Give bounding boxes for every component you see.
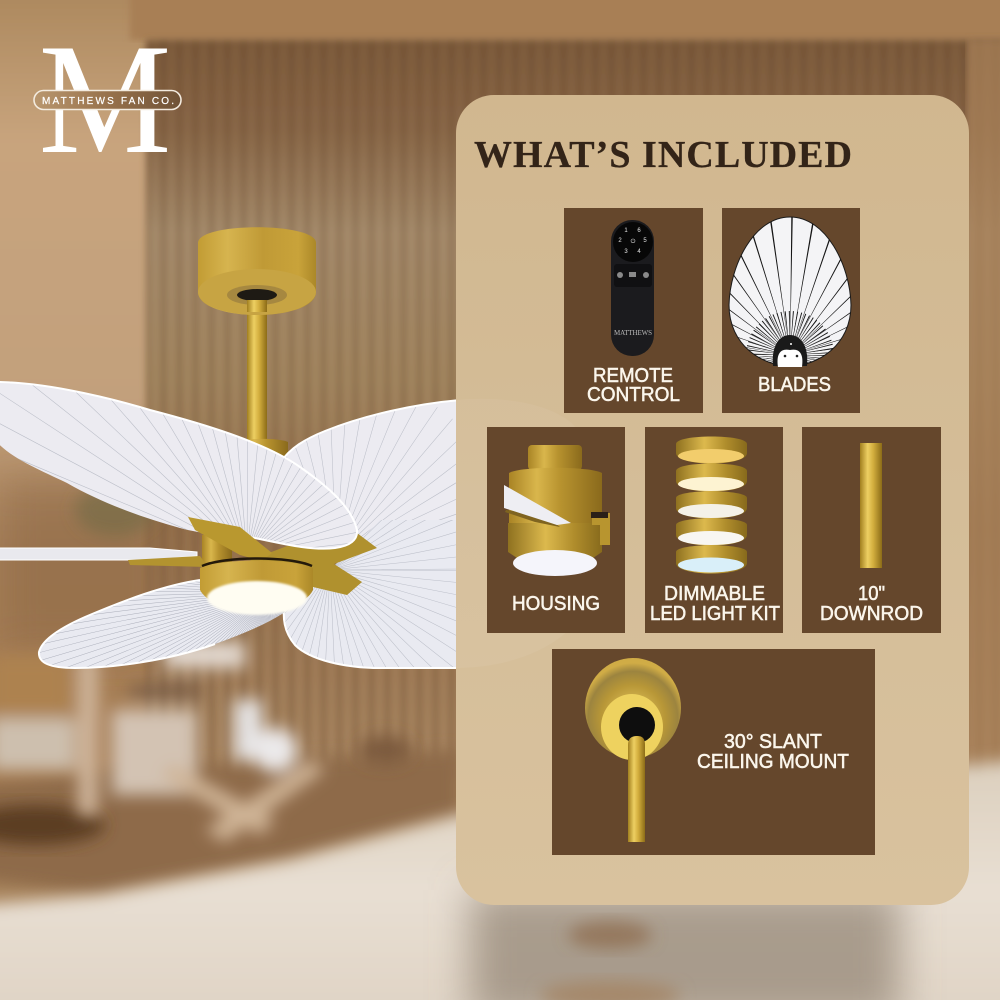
downrod [247, 295, 267, 445]
heading: WHAT’S INCLUDED [474, 134, 852, 176]
icon: downrod [860, 443, 882, 568]
icon: remote: 6 [637, 228, 641, 234]
icon: remote [611, 220, 654, 356]
ceiling fan product [0, 227, 456, 669]
fan blade: right lower [282, 520, 456, 669]
label: HOUSING [512, 593, 600, 615]
logo name pill [34, 90, 181, 110]
panel: what's included [456, 95, 969, 905]
fan arm: left [128, 556, 208, 567]
downrod collar [240, 439, 288, 470]
icon: palm blade [728, 216, 852, 367]
floor [0, 760, 1000, 1000]
ceiling band [130, 0, 1000, 40]
logo: Matthews Fan Co. [34, 12, 181, 187]
label: 30° SLANT [724, 731, 822, 753]
fan blade: lower left [38, 579, 285, 669]
label: REMOTE [593, 365, 673, 387]
motor housing band [202, 558, 312, 566]
icon: stacked LED rings [676, 436, 747, 574]
fan arm: front left [188, 517, 272, 561]
faint blade ghost behind panel [456, 399, 602, 668]
label: 10" [858, 583, 885, 605]
icon: slant mount [585, 658, 681, 842]
label: DOWNROD [820, 603, 923, 625]
right wall highlights [967, 40, 1000, 770]
icon: remote: 1 [624, 228, 628, 234]
furniture blur [0, 642, 411, 842]
LED light [207, 581, 307, 615]
label: LED LIGHT KIT [650, 603, 780, 625]
fan blade: right upper [284, 399, 456, 538]
logo monogram M: M [39, 12, 171, 187]
card: downrod [802, 427, 941, 633]
label: BLADES [758, 374, 831, 396]
icon: remote: 3 [624, 249, 628, 255]
card: slant ceiling mount [552, 649, 875, 855]
fan blade: far left thin [0, 548, 197, 560]
plant blur [75, 484, 155, 536]
label: CEILING MOUNT [697, 751, 849, 773]
dim lower wall shadow [0, 480, 170, 650]
fan blade: upper left front [0, 381, 358, 550]
slatted wooden wall [146, 40, 1000, 780]
card: blades [722, 208, 860, 413]
motor housing upper [202, 535, 232, 575]
card: housing [487, 427, 625, 633]
icon: motor housing [504, 445, 610, 576]
card: dimmable LED light kit [645, 427, 783, 633]
icon: remote: 2 [618, 238, 622, 244]
card: remote control [564, 208, 703, 413]
icon: remote: MATTHEWS [614, 329, 652, 337]
panel cast shadow on floor [470, 890, 900, 1000]
icon: remote: 4 [637, 249, 641, 255]
icon: remote: ⏻ [631, 238, 636, 245]
label: CONTROL [587, 384, 680, 406]
ceiling canopy [198, 227, 316, 315]
label: DIMMABLE [664, 583, 765, 605]
rug / floor shadow [0, 750, 460, 895]
left wall [0, 0, 155, 830]
icon: remote: 5 [643, 238, 647, 244]
motor housing [200, 560, 313, 611]
logo name pill: MATTHEWS FAN CO. [42, 96, 174, 107]
fan arm: right [250, 530, 377, 595]
